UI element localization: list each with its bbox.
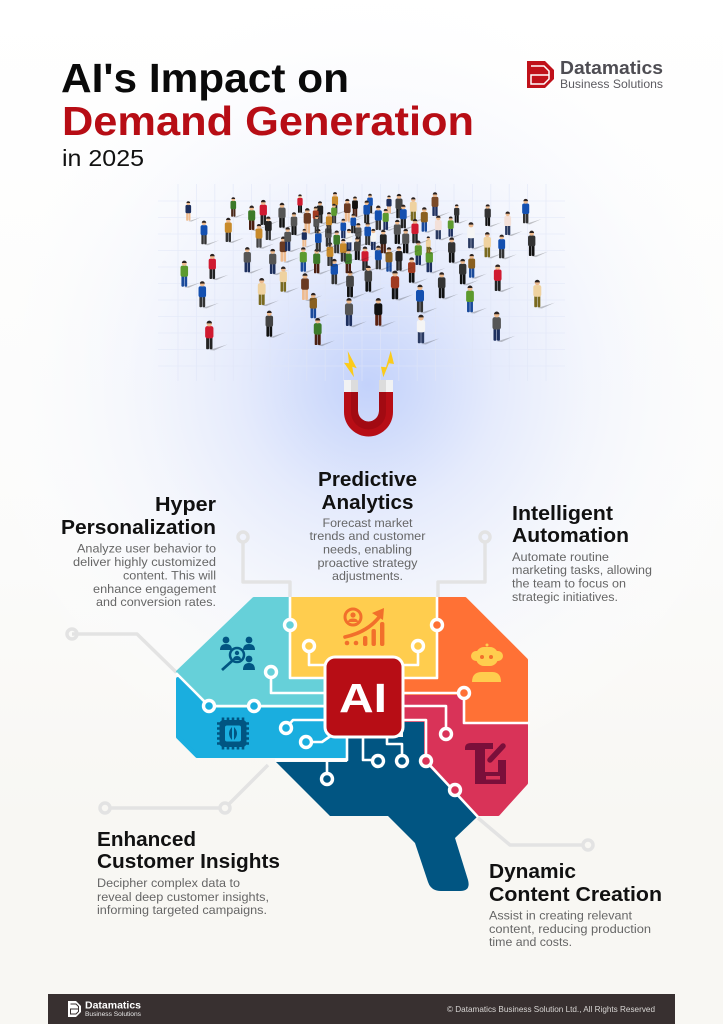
crowd of people on a grid	[158, 184, 565, 381]
text block: enhanced customer insights: informing targeted campaigns.	[97, 903, 267, 917]
text block: enhanced customer insights	[97, 828, 280, 917]
heading: Dynamic	[489, 860, 576, 883]
text block: intelligent automation: Automate routine	[512, 550, 609, 564]
icon: robot	[471, 644, 503, 682]
logo: Datamatics	[527, 57, 663, 91]
brain diagram	[176, 597, 530, 891]
text block: intelligent automation	[512, 502, 652, 604]
footer logo: Datamatics	[85, 1000, 141, 1012]
connector: dynamic content creation	[478, 818, 593, 850]
icon: growth chart with person	[345, 608, 384, 646]
heading: Intelligent	[512, 502, 613, 525]
copyright: © Datamatics Business Solution Ltd., All Rights Reserved	[447, 1004, 655, 1014]
text block: hyper personalization: and conversion rates.	[96, 595, 216, 609]
text block: enhanced customer insights: Customer Insights	[97, 850, 280, 873]
circuit lines	[176, 597, 530, 817]
title: AI's Impact on	[61, 55, 349, 101]
text block: predictive analytics	[310, 468, 426, 583]
heading: Hyper	[155, 493, 216, 516]
AI chip	[325, 657, 403, 737]
icon: people search	[220, 637, 255, 670]
connector: hyper personalization	[67, 629, 177, 673]
text block: intelligent automation: strategic initiatives.	[512, 590, 618, 604]
connector: predictive analytics	[238, 532, 290, 597]
footer bar	[48, 994, 675, 1024]
text block: intelligent automation: marketing tasks, allowing	[512, 563, 652, 577]
connector: intelligent automation	[438, 532, 490, 597]
text block: hyper personalization: Analyze user behavior to	[77, 542, 216, 556]
brain segment: pink	[403, 693, 526, 814]
AI chip: AI	[339, 675, 387, 721]
icon: scroll and quill	[465, 743, 506, 784]
text block: predictive analytics: Analytics	[322, 491, 414, 514]
text block: hyper personalization: content. This will	[123, 568, 216, 582]
text block: hyper personalization	[61, 493, 217, 609]
heading: Enhanced	[97, 828, 196, 851]
footer logo: Business Solutions	[85, 1011, 142, 1018]
text block: predictive analytics: adjustments.	[332, 569, 403, 583]
text block: enhanced customer insights: Decipher complex data to	[97, 876, 240, 890]
brain segment: yellow	[290, 597, 438, 679]
circuit nodes	[204, 620, 470, 796]
brain segment: dark blue stem	[276, 722, 477, 891]
text block: dynamic content creation: Assist in creating relevant	[489, 908, 633, 922]
text block: predictive analytics: Forecast market	[322, 516, 413, 530]
text block: hyper personalization: enhance engagement	[93, 582, 217, 596]
text block: dynamic content creation: content, reducing production	[489, 922, 651, 936]
text block: hyper personalization: deliver highly customized	[73, 555, 216, 569]
text block: intelligent automation: the team to focus on	[512, 576, 626, 590]
text block: enhanced customer insights: reveal deep customer insights,	[97, 890, 269, 904]
title: Demand Generation	[62, 98, 474, 144]
icon: magnet with lightning bolts	[344, 351, 394, 436]
title: in 2025	[62, 145, 144, 171]
title	[61, 55, 474, 171]
footer logo	[68, 1000, 142, 1018]
text block: intelligent automation: Automation	[512, 524, 629, 547]
text block: predictive analytics: proactive strategy	[318, 556, 418, 570]
brain segment: blue	[178, 679, 345, 756]
text block: predictive analytics: trends and customer	[310, 529, 426, 543]
text block: predictive analytics: needs, enabling	[323, 542, 412, 556]
connector: enhanced customer insights	[100, 765, 268, 813]
text block: hyper personalization: Personalization	[61, 516, 216, 539]
logo: Datamatics: Datamatics	[560, 57, 663, 78]
text block: dynamic content creation	[489, 860, 662, 949]
text block: dynamic content creation: Content Creation	[489, 883, 662, 906]
brain segment: orange	[403, 599, 526, 721]
icon: AI processor	[217, 718, 249, 750]
brain segment: teal	[178, 599, 325, 706]
logo: Datamatics: Business Solutions	[560, 77, 663, 91]
text block: dynamic content creation: time and costs.	[489, 935, 572, 949]
heading: Predictive	[318, 468, 417, 491]
